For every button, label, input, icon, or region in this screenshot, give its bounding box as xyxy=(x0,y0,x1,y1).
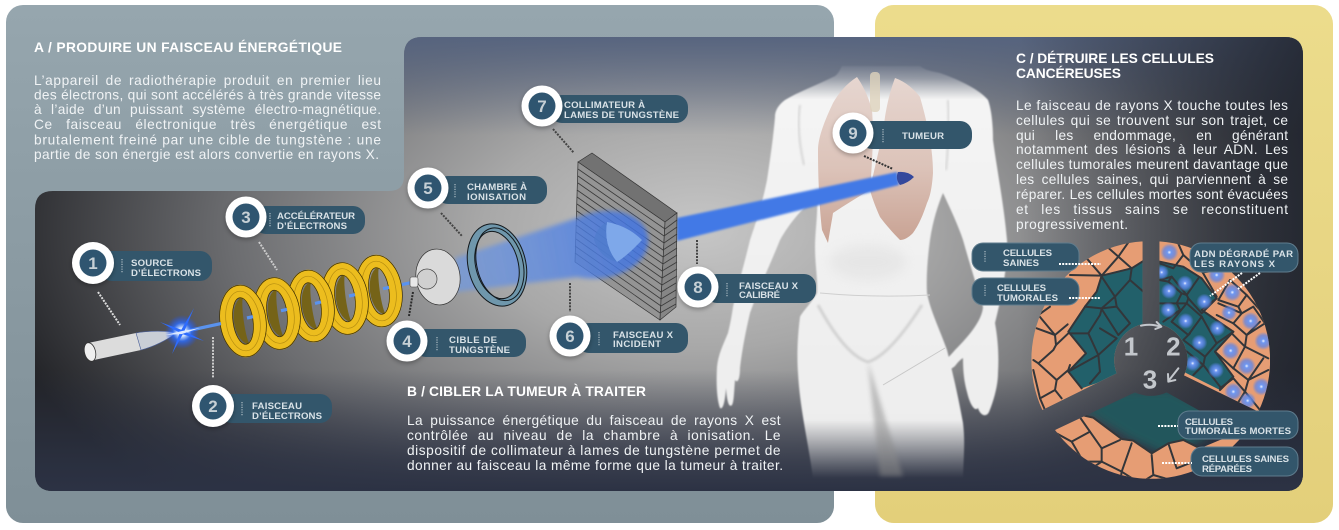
callout: cellules saines xyxy=(972,243,1079,271)
callout 8: faisceau X calibré: FAISCEAU X xyxy=(739,281,799,292)
callout 3: accélérateur d'électrons: D’ÉLECTRONS xyxy=(277,220,348,232)
wide incident X-ray beam xyxy=(455,211,648,292)
callout 5: chambre à ionisation xyxy=(408,168,547,208)
arrow 2 to 3 xyxy=(1168,368,1178,382)
callout: cellules tumorales xyxy=(972,278,1079,305)
callout: ADN dégradé par les rayons X: ADN DÉGRADÉ PAR xyxy=(1194,248,1293,260)
callout: ADN dégradé par les rayons X: LES RAYONS X xyxy=(1194,259,1276,270)
callout 6: faisceau X incident xyxy=(550,316,688,356)
callout: cellules saines réparées: CELLULES SAINES xyxy=(1202,454,1290,465)
callout 4: cible de tungstène: 4 xyxy=(402,332,412,351)
callout 7: collimateur à lames de tungstène: COLLIMATEUR À xyxy=(564,99,645,111)
callout 1: source d'électrons: SOURCE xyxy=(131,258,174,269)
electron accelerator rings xyxy=(215,252,407,360)
collimator xyxy=(575,153,677,320)
heading C: C / DÉTRUIRE LES CELLULES xyxy=(1016,50,1214,66)
text block B: dispositif de collimateur à lames de tungstène permet de xyxy=(407,443,780,458)
text block C: Le faisceau de rayons X touche toutes les xyxy=(1016,98,1288,113)
text block A: brutalement freiné par une cible de tungstène : une xyxy=(34,132,381,148)
text block B: La puissance énergétique du faisceau de rayons X est xyxy=(407,413,781,428)
callout 9: tumeur: TUMEUR xyxy=(902,131,944,142)
electron source xyxy=(82,331,178,363)
text block C: progressivement. xyxy=(1016,217,1128,232)
text block A: partie de son énergie est alors convertie en rayons X. xyxy=(34,147,379,162)
sector 3: dead tumour cells and repaired healthy cells xyxy=(1055,392,1240,479)
callout 5: chambre à ionisation: 5 xyxy=(423,179,433,198)
callout 3: accélérateur d'électrons: ACCÉLÉRATEUR xyxy=(277,210,355,222)
white leader lines on cell wheel xyxy=(1059,264,1260,463)
hub numbers: 2 xyxy=(1166,331,1181,361)
text block C: cellules qui se trouvent sur son trajet, ce xyxy=(1016,113,1288,128)
callout 4: cible de tungstène: CIBLE DE xyxy=(449,335,498,346)
text block C: et les tissus sains se reconstituent xyxy=(1016,202,1288,217)
callout 2: faisceau d'électrons: D’ÉLECTRONS xyxy=(252,410,323,422)
heading C xyxy=(1016,50,1214,81)
collimator opening xyxy=(606,222,642,262)
human body figure xyxy=(717,66,1007,478)
text block C: cellules tumorales meurent davantage que xyxy=(1016,157,1288,172)
callout: cellules saines: SAINES xyxy=(1003,258,1040,269)
callout 9: tumeur: 9 xyxy=(848,124,858,143)
lungs xyxy=(818,72,933,243)
heading B: B / CIBLER LA TUMEUR À TRAITER xyxy=(407,383,646,399)
dotted leader lines xyxy=(98,129,893,378)
flare at electron source xyxy=(160,308,204,354)
panel: yellow background C xyxy=(875,5,1333,523)
text block C: qui les endommage, en générant xyxy=(1016,128,1288,143)
callout: ADN dégradé par les rayons X xyxy=(1190,243,1298,272)
callout 1: source d'électrons: 1 xyxy=(88,254,98,273)
hub numbers xyxy=(1124,331,1181,395)
callout: cellules tumorales mortes xyxy=(1178,411,1298,439)
callout 2: faisceau d'électrons: 2 xyxy=(208,397,218,416)
text block A: Ce faisceau électronique très énergétique est xyxy=(34,117,381,132)
callout 1: source d'électrons: D’ÉLECTRONS xyxy=(131,267,202,279)
callout 8: faisceau X calibré: CALIBRÉ xyxy=(739,289,781,301)
ionisation chamber ring xyxy=(464,222,531,308)
text block A: L’appareil de radiothérapie produit en premier lieu xyxy=(34,73,381,88)
cell wheel diagram xyxy=(1031,242,1270,479)
callout 3: accélérateur d'électrons: 3 xyxy=(241,208,251,227)
callout 5: chambre à ionisation: IONISATION xyxy=(467,192,526,203)
callout 6: faisceau X incident: FAISCEAU X xyxy=(613,330,674,341)
callout 8: faisceau X calibré xyxy=(678,266,816,308)
callout 2: faisceau d'électrons: FAISCEAU xyxy=(252,401,302,412)
callout: cellules saines: CELLULES xyxy=(1003,248,1053,259)
hub numbers: 3 xyxy=(1143,365,1157,395)
text block C xyxy=(1016,98,1288,232)
callout 7: collimateur à lames de tungstène xyxy=(522,86,688,126)
sector 1: healthy and tumour cells xyxy=(1031,242,1143,410)
text block C: réparer. Les cellules mortes sont évacuées xyxy=(1016,187,1288,202)
callout 5: chambre à ionisation: CHAMBRE À xyxy=(467,181,527,193)
callout: cellules tumorales mortes: CELLULES xyxy=(1185,417,1234,428)
text block A: des électrons, qui sont accélérés à très grande vitesse xyxy=(34,88,381,102)
callout 7: collimateur à lames de tungstène: LAMES DE TUNGSTÈNE xyxy=(564,109,680,121)
tungsten target xyxy=(410,246,464,308)
text block B xyxy=(407,413,783,473)
text block C: les cellules saines, qui parviennent à se xyxy=(1016,172,1288,187)
callout: cellules tumorales: CELLULES xyxy=(997,283,1047,294)
callout 9: tumeur xyxy=(832,112,972,154)
icon: tumour xyxy=(897,172,914,185)
arrow 1 to 2 xyxy=(1141,322,1161,329)
callout 2: faisceau d'électrons xyxy=(192,385,332,427)
callout 1: source d'électrons xyxy=(72,242,212,284)
text block C: notamment des lésions à leur ADN. Les xyxy=(1016,142,1288,157)
text block B: contrôlée au niveau de la chambre à ionisation. Le xyxy=(407,428,780,443)
leg gap shading xyxy=(868,362,903,476)
heading A: A / PRODUIRE UN FAISCEAU ÉNERGÉTIQUE xyxy=(34,39,342,55)
hub numbers: 1 xyxy=(1124,331,1138,361)
callout 3: accélérateur d'électrons xyxy=(226,196,365,238)
callout 6: faisceau X incident: INCIDENT xyxy=(613,339,661,350)
callout 6: faisceau X incident: 6 xyxy=(565,327,575,346)
heading C: CANCÉREUSES xyxy=(1016,65,1121,81)
callout: cellules tumorales mortes: TUMORALES MORTES xyxy=(1185,426,1292,437)
text block A: à l’aide d’un puissant système électro-magnétique. xyxy=(34,102,381,117)
callout 4: cible de tungstène: TUNGSTÈNE xyxy=(449,344,511,356)
callout 8: faisceau X calibré: 8 xyxy=(693,278,703,297)
callout 4: cible de tungstène xyxy=(386,320,526,362)
electron beam xyxy=(182,282,414,332)
callout: cellules saines réparées: RÉPARÉES xyxy=(1202,463,1253,475)
panel: grey background A xyxy=(6,5,834,523)
narrow X-ray beam to tumour xyxy=(677,172,899,241)
sector 2: damaged cells with DNA lesions xyxy=(1159,242,1270,410)
text block A xyxy=(34,73,381,162)
callout: cellules saines réparées xyxy=(1191,447,1298,476)
text block B: donner au faisceau la même forme que la tumeur à traiter. xyxy=(407,458,783,473)
callout 7: collimateur à lames de tungstène: 7 xyxy=(537,97,547,116)
callout: cellules tumorales: TUMORALES xyxy=(997,293,1059,304)
